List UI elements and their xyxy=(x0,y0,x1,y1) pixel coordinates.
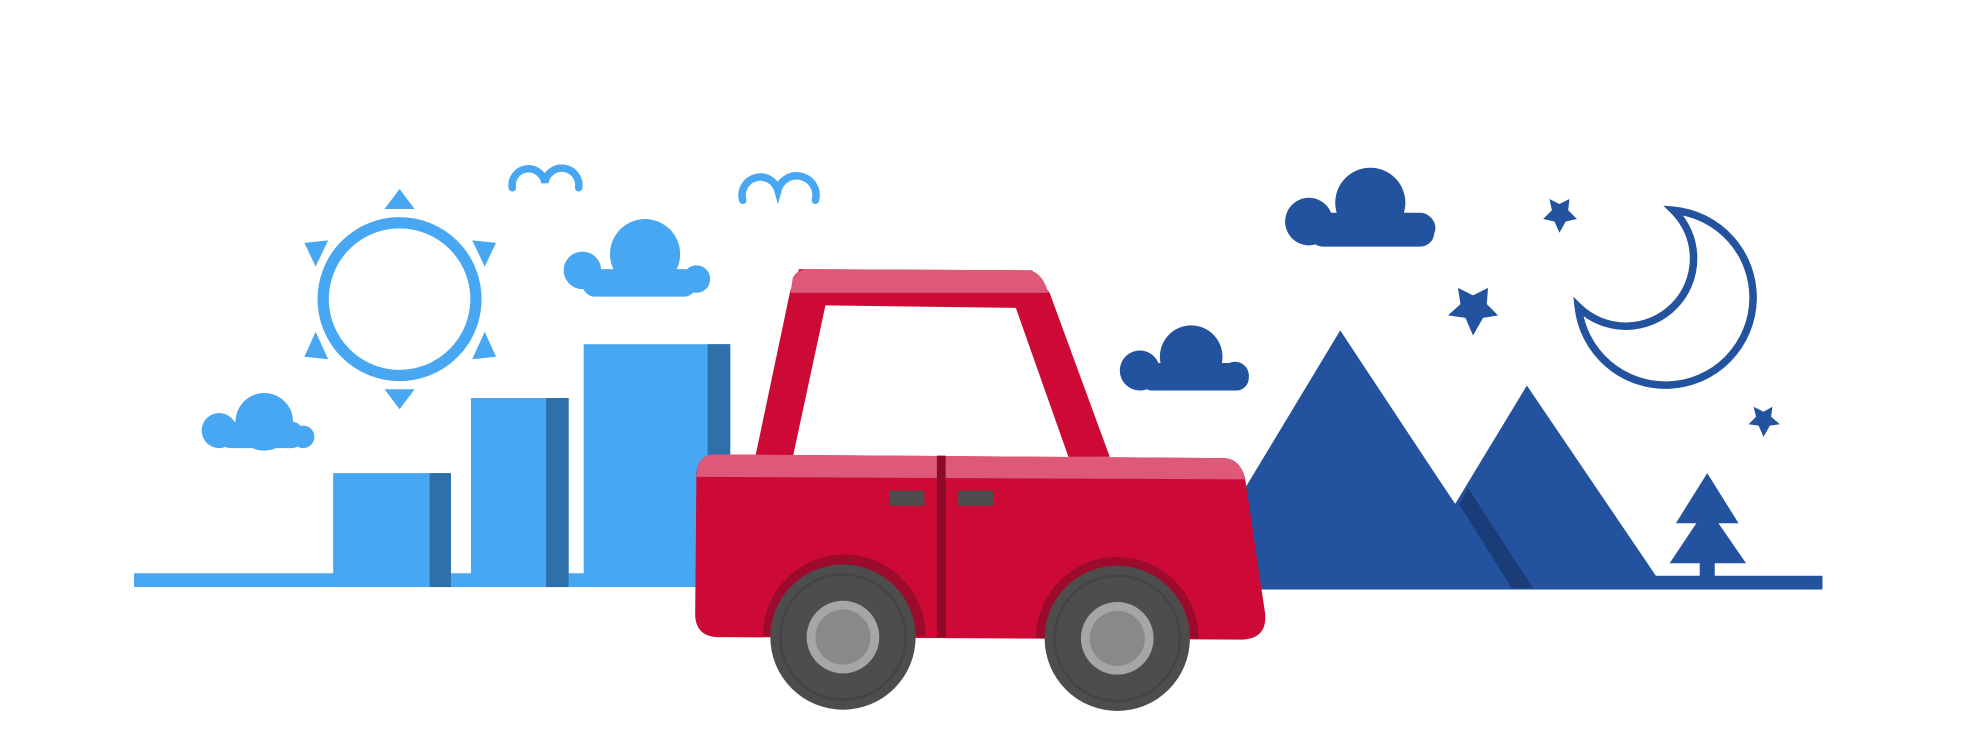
ground: day xyxy=(134,573,710,587)
icon: stars xyxy=(1448,199,1780,437)
car cabin xyxy=(755,269,1110,457)
icon: cloud left xyxy=(202,393,314,451)
icon: tree xyxy=(1670,473,1746,578)
bar chart: buildings xyxy=(333,344,730,587)
wheels xyxy=(770,564,916,710)
car body xyxy=(695,454,1265,640)
icon: mountains xyxy=(1234,330,1656,588)
door handles xyxy=(889,491,924,506)
door line xyxy=(937,456,946,637)
icon: birds xyxy=(512,168,816,200)
icon: sun xyxy=(304,189,496,409)
ground: night xyxy=(1240,576,1822,590)
icon: moon xyxy=(1578,210,1753,385)
icon: dark clouds xyxy=(1120,168,1435,391)
car xyxy=(695,269,1265,711)
wheel arches xyxy=(763,554,926,636)
icon: cloud middle xyxy=(564,219,710,297)
